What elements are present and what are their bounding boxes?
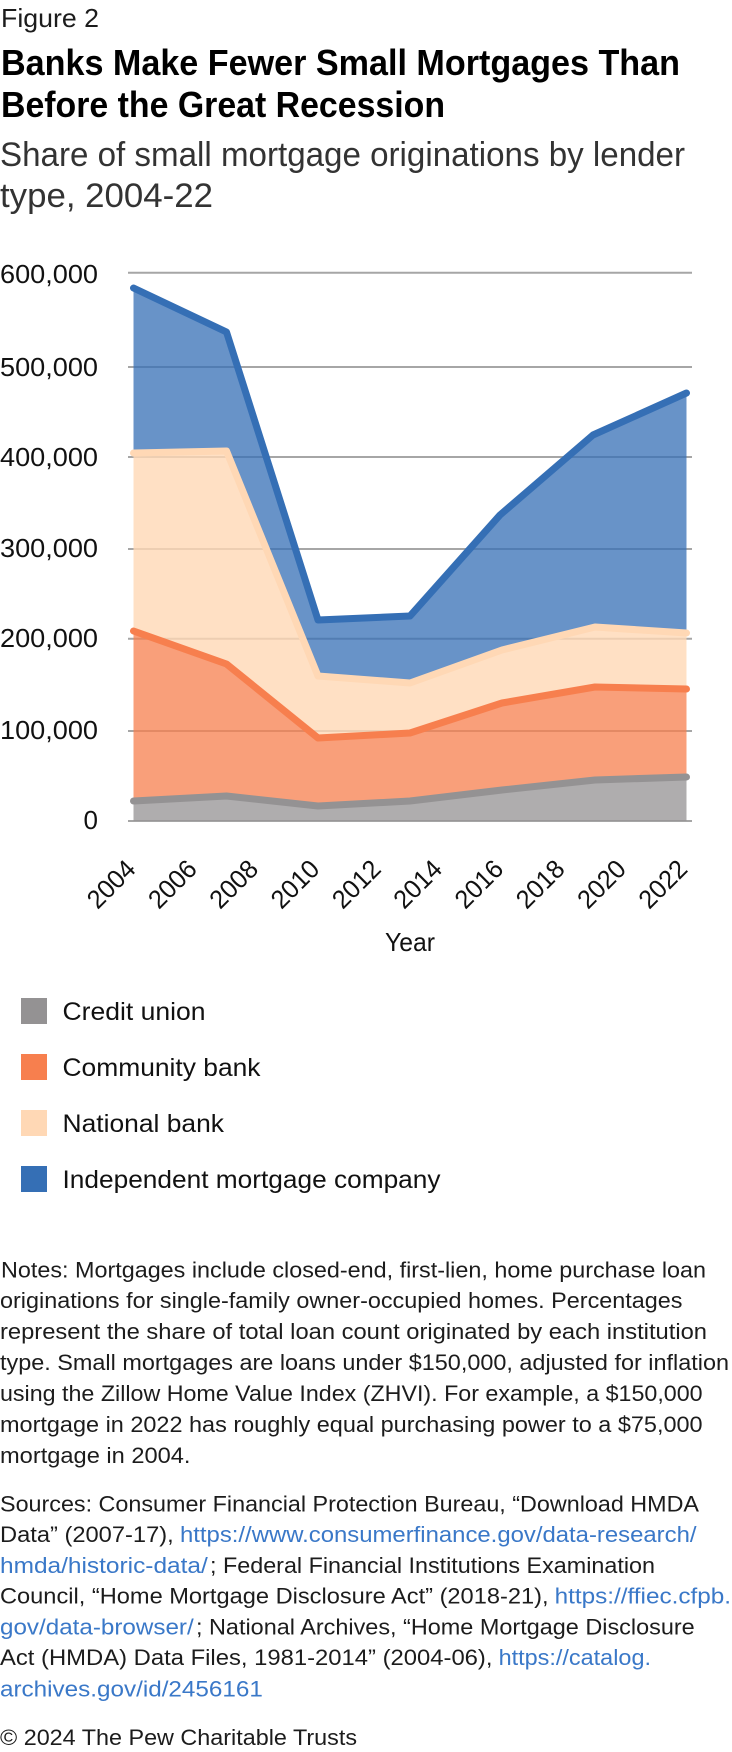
area: independent mortgage company	[134, 288, 686, 683]
title: Before the Great Recession	[1, 84, 445, 125]
x-axis labels: 2006	[142, 854, 203, 914]
line: national bank	[134, 451, 686, 683]
notes: represent the share of total loan count originated by each institution	[0, 1319, 707, 1344]
y-axis labels	[0, 259, 98, 835]
area: national bank	[134, 451, 686, 738]
y-axis labels: 600,000	[0, 259, 98, 289]
x-axis labels: 2008	[203, 854, 264, 914]
sources: Sources: Consumer Financial Protection Bureau, “Download HMDA	[0, 1492, 699, 1516]
notes: originations for single-family owner-occupied homes. Percentages	[0, 1288, 682, 1313]
x-axis labels: 2022	[632, 854, 693, 914]
y-axis labels: 100,000	[0, 715, 98, 745]
title: Banks Make Fewer Small Mortgages Than	[1, 42, 680, 83]
area: community bank	[134, 631, 686, 806]
copyright: © 2024 The Pew Charitable Trusts	[0, 1725, 357, 1750]
line: independent mortgage company	[134, 288, 686, 620]
legend	[21, 998, 441, 1194]
sources: Council, “Home Mortgage Disclosure Act” (2018-21),	[0, 1584, 548, 1608]
legend item: independent mortgage company: Independent mortgage company	[62, 1166, 441, 1194]
sources: gov/data-browser/	[0, 1614, 195, 1640]
y-axis labels: 0	[84, 805, 98, 835]
sources: https://catalog.	[499, 1645, 651, 1670]
legend item: community bank: Community bank	[62, 1054, 261, 1082]
subtitle	[0, 136, 685, 215]
line: credit union	[134, 777, 686, 806]
sources: hmda/historic-data/	[0, 1553, 209, 1578]
x-axis labels: 2004	[81, 854, 141, 914]
y-axis labels: 400,000	[0, 442, 98, 472]
notes: Notes: Mortgages include closed-end, first-lien, home purchase loan	[1, 1258, 706, 1282]
sources: ; Federal Financial Institutions Examination	[210, 1553, 655, 1578]
area: credit union	[134, 777, 686, 821]
x-axis labels	[81, 854, 693, 914]
subtitle: type, 2004-22	[0, 177, 213, 215]
legend item: credit union: Credit union	[62, 998, 206, 1026]
line: community bank	[134, 631, 686, 738]
y-axis labels: 300,000	[0, 533, 98, 563]
sources	[0, 1492, 731, 1702]
sources: archives.gov/id/2456161	[0, 1676, 263, 1702]
x-axis labels: 2010	[264, 854, 325, 914]
subtitle: Share of small mortgage originations by lender	[0, 136, 685, 174]
stacked area chart	[0, 259, 693, 957]
x-axis title: Year	[385, 927, 435, 957]
sources: ; National Archives, “Home Mortgage Disclosure	[196, 1614, 695, 1640]
title	[1, 42, 680, 125]
notes: mortgage in 2022 has roughly equal purchasing power to a $75,000	[0, 1412, 703, 1437]
sources: https://www.consumerfinance.gov/data-research/	[180, 1522, 697, 1547]
figure label: Figure 2	[1, 3, 99, 33]
notes: using the Zillow Home Value Index (ZHVI). For example, a $150,000	[0, 1381, 703, 1406]
legend item: national bank: National bank	[62, 1110, 225, 1138]
x-axis labels: 2020	[571, 854, 632, 914]
notes: mortgage in 2004.	[0, 1443, 190, 1468]
x-axis labels: 2014	[387, 854, 448, 914]
x-axis labels: 2012	[326, 854, 387, 914]
sources: https://ffiec.cfpb.	[555, 1584, 731, 1608]
notes: type. Small mortgages are loans under $150,000, adjusted for inflation	[0, 1350, 729, 1375]
x-axis labels: 2018	[510, 854, 571, 914]
sources: Data” (2007-17),	[0, 1522, 174, 1547]
y-axis labels: 500,000	[0, 352, 98, 382]
x-axis labels: 2016	[448, 854, 509, 914]
notes	[0, 1258, 729, 1468]
y-axis labels: 200,000	[0, 623, 98, 653]
sources: Act (HMDA) Data Files, 1981-2014” (2004-06),	[0, 1645, 492, 1670]
